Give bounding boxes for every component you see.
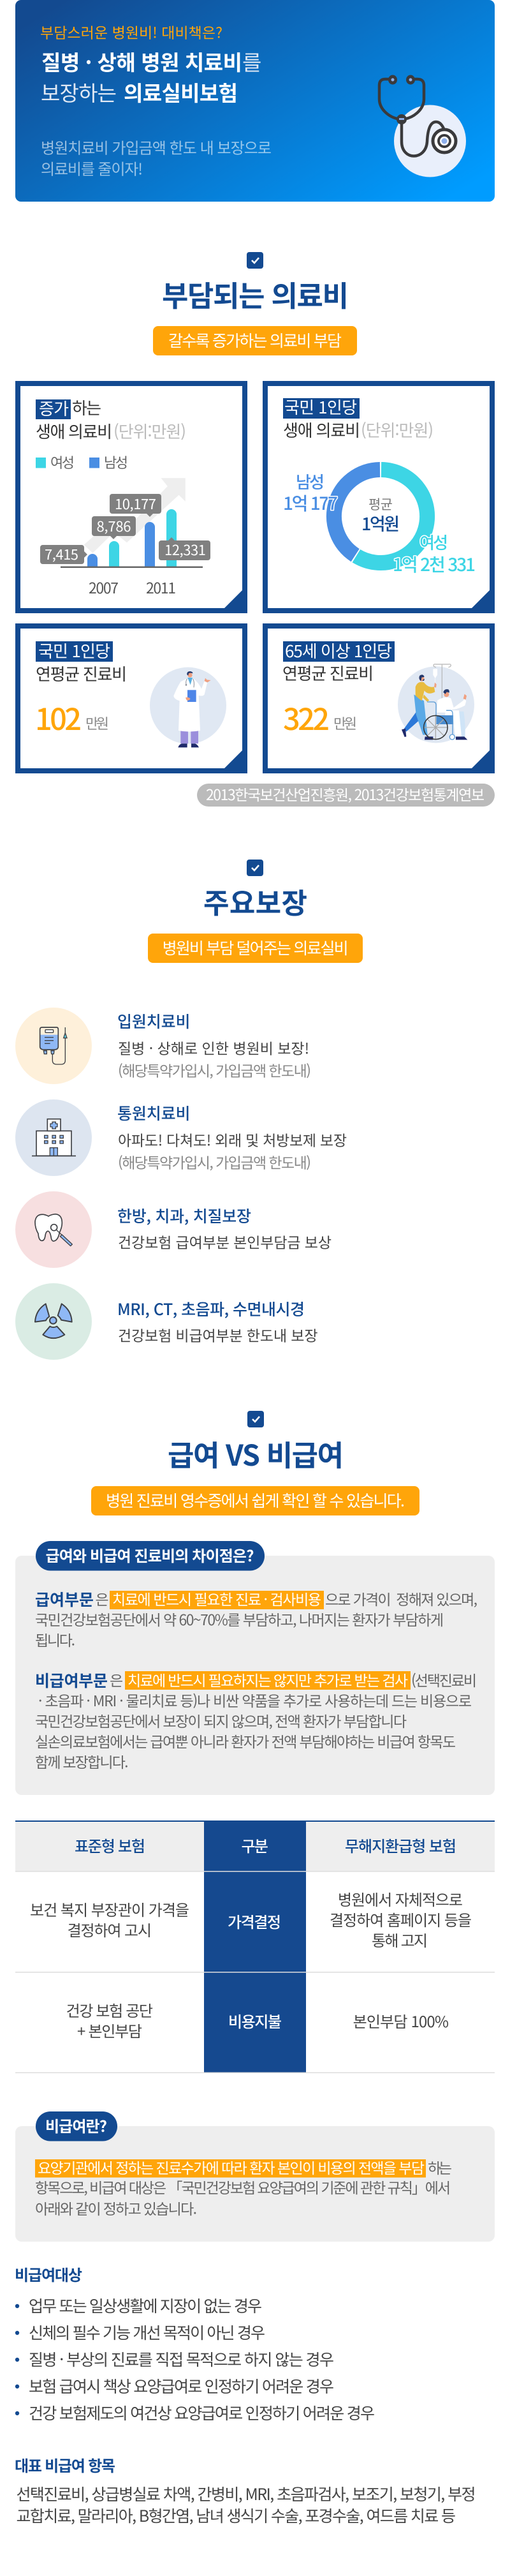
table row: 가격결정: 결정하여 고시 <box>68 1918 152 1940</box>
stat: 102만원: 만원 <box>85 713 109 733</box>
bar chart: 12,331 <box>164 539 206 560</box>
panel title pill: 비급여란? <box>45 2114 107 2136</box>
icon: IV bag <box>40 1027 67 1064</box>
panel text: 항목으로, 비급여 대상은 「국민건강보험 요양급여의 기준에 관한 규칙」에서 <box>35 2176 451 2198</box>
text: 비급여부문: · 초음파 · MRI · 물리치료 등)나 비싼 약품을 추가로 사용하는데 드는 비용으로 <box>38 1689 472 1711</box>
donut chart <box>283 470 476 577</box>
donut chart: 1억 177 <box>283 490 338 516</box>
list: 비급여대상: 업무 또는 일상생활에 지장이 없는 경우 <box>29 2294 262 2317</box>
text: 급여부문: 국민건강보험공단에서 약 60~70%를 부담하고, 나머지는 환자가 부담하게 <box>35 1608 444 1630</box>
chart legend <box>36 452 128 472</box>
list: 비급여대상 <box>15 2294 375 2424</box>
bar chart: 10,177 <box>115 493 156 514</box>
icon: section check 3 <box>247 1411 264 1427</box>
card heading <box>282 639 395 685</box>
table header <box>75 1834 456 1856</box>
card heading: (단위:만원) <box>113 419 186 443</box>
card heading: 국민 1인당 <box>284 395 357 419</box>
text: 비급여부문: 은 <box>110 1669 123 1690</box>
stat: 102만원: 102 <box>35 695 82 739</box>
hero description: 의료비를 줄이자! <box>41 157 143 179</box>
coverage item: 입원치료비: (해당특약가입시, 가입금액 한도내) <box>118 1059 311 1081</box>
coverage item: 입원치료비 <box>15 1008 311 1084</box>
table row: 비용지불: 본인부담 100% <box>353 2009 449 2032</box>
stat: 322만원: 322 <box>283 695 330 739</box>
text: 급여부문: 됩니다. <box>35 1628 75 1650</box>
card heading: 하는 <box>72 396 101 419</box>
panel text <box>35 2156 452 2219</box>
bar chart <box>40 478 210 598</box>
panel: 국민 1인당 연평균 진료비 <box>18 626 245 771</box>
comparison table <box>15 1820 495 2073</box>
card heading: 증가 <box>39 396 69 420</box>
text: 비급여부문: (선택진료비 <box>411 1669 477 1690</box>
card heading: (단위:만원) <box>361 418 433 442</box>
text: 대표 비급여 항목 목록: 선택진료비, 상급병실료 차액, 간병비, MRI, 초음파검사, 보조기, 보청기, 부정 <box>17 2482 476 2505</box>
table row: 가격결정 <box>30 1887 472 1951</box>
chart legend: 남성 <box>104 452 128 472</box>
icon: section check 1 <box>247 252 263 269</box>
bar chart: 7,415 <box>45 544 78 564</box>
icon: section check 2 <box>247 860 263 876</box>
list: 비급여대상: 신체의 필수 기능 개선 목적이 아닌 경우 <box>29 2321 265 2344</box>
donut chart: 여성 <box>419 530 448 554</box>
card heading: 연평균 진료비 <box>36 662 127 685</box>
stat: 322만원: 만원 <box>333 713 357 733</box>
bar chart: 8,786 <box>97 516 131 536</box>
illustration: wheelchair and caregiver <box>398 664 474 743</box>
card heading: 국민 1인당 <box>38 639 110 662</box>
icon: hospital <box>32 1119 76 1156</box>
panel: 국민 1인당 생애 의료비 <box>265 383 492 611</box>
panel: 급여와 비급여 진료비의 차이점 <box>15 1541 495 1795</box>
card heading <box>36 639 127 685</box>
heading: 부담되는 의료비: 부담되는 의료비 <box>162 273 349 315</box>
bar chart: 2011 <box>146 576 176 598</box>
list: 비급여대상: 건강 보험제도의 여건상 요양급여로 인정하기 어려운 경우 <box>29 2401 375 2424</box>
donut chart: 평균 <box>368 495 393 514</box>
stat: 102만원 <box>35 695 109 739</box>
panel text: 아래와 같이 정하고 있습니다. <box>35 2197 197 2219</box>
subtitle pill: 병원비 부담 덜어주는 의료실비 <box>148 934 363 963</box>
subtitle pill: 갈수록 증가하는 의료비 부담 <box>153 326 357 355</box>
panel title pill <box>36 2111 117 2141</box>
heading: 주요보장: 주요보장 <box>203 881 307 921</box>
heading: 대표 비급여 항목: 대표 비급여 항목 <box>15 2453 115 2476</box>
table header: 구분 <box>241 1834 268 1856</box>
table row: 가격결정: 보건 복지 부장관이 가격을 <box>30 1898 189 1920</box>
coverage item: 통원치료비: 아파도! 다쳐도! 외래 및 처방보제 보장 <box>118 1128 347 1150</box>
text: 급여부문: 으로 가격이 정해져 있으며, <box>325 1588 477 1609</box>
text: 급여부문 <box>35 1588 477 1650</box>
source note: 2013한국보건산업진흥원, 2013건강보험통계연보 <box>206 783 484 805</box>
table row: 가격결정: 병원에서 자체적으로 <box>338 1887 463 1910</box>
subtitle pill: 갈수록 증가하는 의료비 부담: 갈수록 증가하는 의료비 부담 <box>168 329 342 352</box>
list: 비급여대상: 질병 · 부상의 진료를 직접 목적으로 하지 않는 경우 <box>29 2348 334 2371</box>
chart legend: 여성 <box>50 452 75 472</box>
text: 비급여부문: 실손의료보험에서는 급여뿐 아니라 환자가 전액 부담해야하는 비급여 항목도 <box>35 1730 456 1752</box>
text: 비급여부문: 국민건강보험공단에서 보장이 되지 않으며, 전액 환자가 부담합니다 <box>35 1709 407 1731</box>
coverage item: 한방, 치과, 치질보장: 건강보험 급여부분 본인부담금 보상 <box>118 1230 332 1252</box>
subtitle pill: 영수증 확인: 병원 진료비 영수증에서 쉽게 확인 할 수 있습니다. <box>106 1489 405 1512</box>
item text: 한방, 치과, 치질보장 <box>117 1204 251 1227</box>
subtitle pill: 병원비 부담 덜어주는 의료실비: 병원비 부담 덜어주는 의료실비 <box>163 936 349 959</box>
table row: 비용지불 <box>66 1999 449 2041</box>
panel: 증가하는 생애 의료비 <box>18 383 245 611</box>
table row: 비용지불: + 본인부담 <box>77 2019 142 2041</box>
icon: stethoscope <box>379 75 466 177</box>
coverage item: 통원치료비: (해당특약가입시, 가입금액 한도내) <box>118 1151 311 1173</box>
text: 대표 비급여 항목 목록: 교합치료, 말라리아, B형간염, 남녀 생식기 수술, 포경수술, 여드름 치료 등 <box>17 2504 456 2527</box>
table row: 가격결정: 통해 고지 <box>372 1928 428 1951</box>
list: 비급여대상: 보험 급여시 책상 요양급여로 인정하기 어려운 경우 <box>29 2374 334 2397</box>
panel: 65세 이상 1인당 연평균 진료비 <box>265 626 492 771</box>
icon: tooth and dental mirror <box>35 1214 72 1246</box>
coverage item: 한방, 치과, 치질보장 <box>15 1191 332 1268</box>
coverage item: MRI, CT, 초음파, 수면내시경: 건강보험 비급여부분 한도내 보장 <box>118 1323 317 1345</box>
coverage item: 통원치료비 <box>15 1099 347 1176</box>
hero description <box>41 135 272 179</box>
icon: radiation symbol <box>35 1304 72 1338</box>
panel text: 요양기관에서 정하는 진료수가에 따라 환자 본인이 비용의 전액을 부담 <box>38 2156 425 2178</box>
donut chart: 1억원 <box>361 510 400 535</box>
table row: 비용지불: 건강 보험 공단 <box>66 1999 153 2021</box>
card heading: 65세 이상 1인당 <box>285 639 392 662</box>
text: 비급여부문 <box>35 1669 477 1772</box>
text: 비급여부문: 비급여부문 <box>35 1669 108 1692</box>
donut chart: 1억 2천 331 <box>393 551 476 577</box>
bar chart: 2007 <box>89 576 119 598</box>
card heading: 생애 의료비 <box>36 419 112 443</box>
panel title pill <box>36 1541 265 1571</box>
table header: 무해지환급형 보험 <box>345 1834 456 1856</box>
hero title: 의료실비보험 <box>124 77 238 107</box>
panel text: 하는 <box>428 2156 452 2178</box>
card heading <box>36 396 186 443</box>
hero kicker: 부담스러운 병원비! 대비책은? <box>40 20 222 42</box>
hero title <box>41 46 261 107</box>
text: 대표 비급여 항목 목록 <box>17 2482 476 2527</box>
stat: 322만원 <box>283 695 357 739</box>
text: 급여부문: 치료에 반드시 필요한 진료 · 검사비용 <box>112 1588 321 1609</box>
table row: 비용지불: 비용지불 <box>228 2009 282 2032</box>
coverage item: 입원치료비: 질병 · 상해로 인한 병원비 보장! <box>118 1036 309 1058</box>
heading: 급여 VS 비급여: 급여 VS 비급여 <box>168 1433 344 1474</box>
panel title pill: 급여와 비급여 진료비의 차이점은? <box>46 1544 254 1566</box>
table header: 표준형 보험 <box>75 1834 145 1856</box>
table row: 가격결정: 결정하여 홈페이지 등을 <box>330 1908 472 1930</box>
text: 비급여부문: 함께 보장합니다. <box>35 1750 129 1772</box>
card heading: 생애 의료비 <box>283 418 360 442</box>
coverage item: MRI, CT, 초음파, 수면내시경 <box>15 1283 317 1360</box>
text: 비급여부문: 치료에 반드시 필요하지는 않지만 추가로 받는 검사 <box>127 1669 408 1690</box>
text: 급여부문: 급여부문 <box>35 1588 94 1611</box>
panel: hero banner <box>15 0 495 202</box>
heading: 비급여대상: 비급여대상 <box>15 2263 82 2285</box>
item text: 통원치료비 <box>117 1101 190 1124</box>
item text: MRI, CT, 초음파, 수면내시경 <box>117 1297 305 1320</box>
hero title: 보장하는 <box>41 77 117 107</box>
illustration: doctor <box>150 667 226 747</box>
item text: 입원치료비 <box>117 1009 190 1032</box>
card heading <box>283 395 433 442</box>
text: 급여부문: 은 <box>96 1588 109 1609</box>
table row: 가격결정: 가격결정 <box>228 1910 281 1932</box>
hero title: 질병 · 상해 병원 치료비 <box>41 46 242 77</box>
donut chart: 남성 <box>296 470 324 493</box>
hero title: 를 <box>242 46 261 77</box>
panel: 비급여란? <box>15 2111 495 2242</box>
hero description: 병원치료비 가입금액 한도 내 보장으로 <box>41 135 272 158</box>
card heading: 연평균 진료비 <box>282 661 374 685</box>
